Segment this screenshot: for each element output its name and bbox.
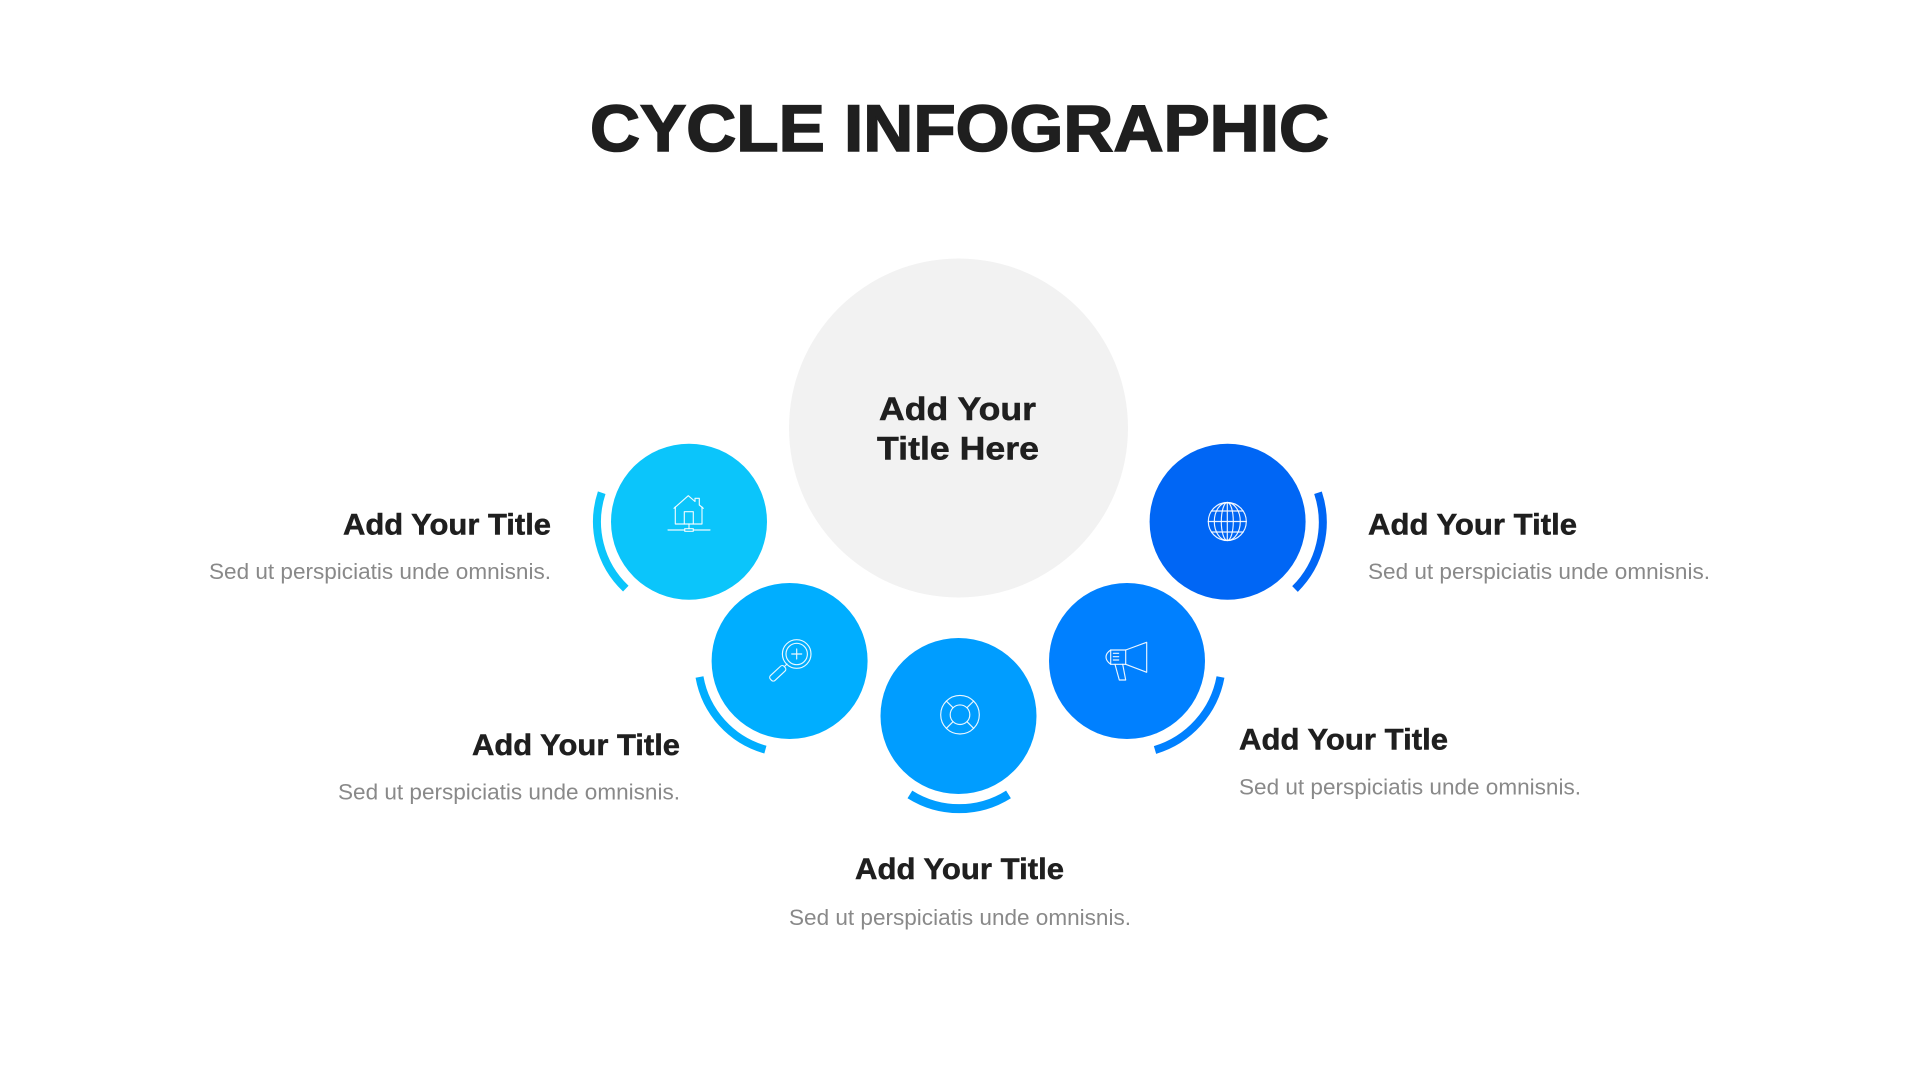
arc: step 5 <box>1295 493 1323 589</box>
icon: house network <box>668 496 710 531</box>
text block: step 4: Add Your Title <box>1239 724 1448 756</box>
circle: step 3 <box>880 638 1036 794</box>
circle: step 5 <box>1150 444 1306 600</box>
icon: megaphone <box>1106 642 1147 680</box>
arc: step 4 <box>1155 677 1220 750</box>
panel: center circle: Title Here <box>877 430 1039 466</box>
text block: step 1: Add Your Title <box>343 508 551 542</box>
text block: step 3 <box>789 853 1131 930</box>
icon: lifebuoy <box>941 695 979 734</box>
text block: step 5: Sed ut perspiciatis unde omnisnis. <box>1368 559 1710 584</box>
panel: step 1 node <box>597 444 767 600</box>
icon: globe <box>1208 502 1246 540</box>
text block: step 4 <box>1239 724 1581 800</box>
text block: step 1: Sed ut perspiciatis unde omnisnis. <box>209 559 551 584</box>
arc: step 2 <box>700 677 765 750</box>
text block: step 5: Add Your Title <box>1368 508 1577 542</box>
text block: step 2: Sed ut perspiciatis unde omnisnis. <box>338 780 680 804</box>
text block: step 5 <box>1368 508 1710 584</box>
text block: step 3: Sed ut perspiciatis unde omnisnis. <box>789 905 1131 930</box>
icon: magnifier <box>769 640 811 682</box>
circle: step 1 <box>611 444 767 600</box>
text block: step 3: Add Your Title <box>855 853 1064 886</box>
panel: step 5 node <box>1150 444 1323 600</box>
text block: step 2 <box>338 729 680 804</box>
text block: step 4: Sed ut perspiciatis unde omnisnis. <box>1239 774 1581 800</box>
panel: step 4 node <box>1049 583 1220 750</box>
title: CYCLE INFOGRAPHIC <box>590 91 1329 165</box>
text block: step 2: Add Your Title <box>472 729 680 762</box>
arc: step 1 <box>597 493 626 589</box>
panel: center circle: Add Your <box>879 391 1036 427</box>
circle: step 2 <box>712 583 868 739</box>
arc: step 3 <box>910 794 1008 809</box>
text block: step 1 <box>209 508 551 584</box>
panel: step 3 node <box>880 638 1036 809</box>
panel: center circle <box>789 258 1128 598</box>
panel: step 2 node <box>700 583 868 750</box>
circle: step 4 <box>1049 583 1205 739</box>
